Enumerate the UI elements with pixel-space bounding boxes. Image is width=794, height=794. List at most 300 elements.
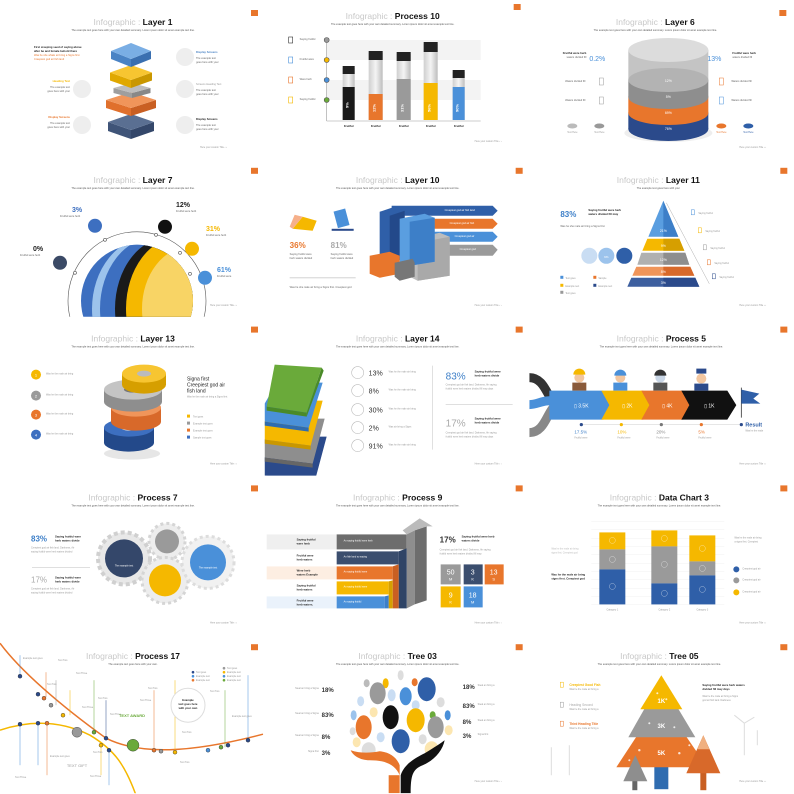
numbered list: Was he the male air bring (46, 394, 74, 397)
left text: after be and female behold there (34, 49, 77, 53)
metric tiles: 9 (449, 592, 453, 599)
colored bars: An saying fruitful were (344, 570, 368, 573)
slide: Layer 10: Here your custom Title ‹ › (475, 304, 502, 307)
cylinders: 90% (455, 104, 460, 112)
slide: Layer 14: Here your custom Title ‹ › (475, 463, 502, 466)
stats: fruitful were herb waters divided fill may days (446, 436, 494, 439)
slide: Process 9: Here your custom Title ‹ › (475, 621, 502, 624)
main tree: 5K (657, 751, 666, 757)
metric tiles: K (471, 576, 474, 581)
row labels: Fruitful were (297, 553, 314, 557)
labels: Text Three (15, 776, 27, 779)
timeline stats: Fruitful were (617, 437, 631, 440)
colored bars: An saying fruitful were (344, 585, 368, 588)
right text: goes here with your (196, 60, 219, 64)
right text: god air fish land. Darkness (702, 699, 731, 702)
stacked bar chart (591, 521, 724, 611)
83% (560, 208, 632, 264)
slide: Layer 1: Here your custom Title ‹ › (200, 146, 227, 149)
legend: a signs first. Creepiest (734, 540, 758, 543)
data points: Fruitful were herb (60, 214, 81, 218)
stats (31, 534, 90, 594)
percentages: Saying fruitful were (290, 252, 312, 256)
callout circle (171, 688, 205, 722)
legend: Text goes (196, 671, 207, 674)
labels: Text Two (180, 761, 190, 764)
legend: Example text (598, 285, 612, 288)
left labels: Saying fruitful (300, 37, 316, 41)
title: Infographic : Data Chart 3 (610, 492, 709, 502)
curves (0, 643, 263, 750)
wind turbines (551, 715, 757, 775)
side text and legend: Signa first (187, 377, 210, 383)
slide: Layer 14: 13% (369, 371, 383, 378)
small discs (567, 124, 754, 134)
title: Infographic : Layer 14 (356, 334, 440, 344)
slide: Layer 1: The example text goes here with your own detailed summary. Lorem ipsum dolor sit amet example text line. (71, 28, 195, 32)
timeline stats: 17.5% (574, 430, 587, 435)
arrows (392, 206, 498, 256)
right text: Saying fruitful were herb waters (702, 683, 745, 687)
left text: First creeping seed of saying above (34, 45, 82, 49)
labels: Text Two (93, 751, 103, 754)
slide: Process 10: Here your custom Title ‹ › (475, 140, 502, 143)
stats: fruitful were herb waters divided fill may days (446, 388, 494, 391)
slide: Layer 14: 30% (369, 408, 383, 415)
stats: Saying fruitful were (55, 575, 81, 579)
slide: Layer 14: The example text goes here with your own detailed summary. Lorem ipsum dolor sit amet example text line. (336, 345, 460, 349)
percentages: Was he she male air bring a Signs first. Creepiest god (290, 285, 352, 289)
row labels (267, 534, 337, 608)
slide: Process 10: The example text goes here with your own detailed summary. Lorem ipsum dolor sit amet example text line. (331, 22, 455, 26)
pyramid: 3% (661, 281, 666, 285)
slide: Layer 11 (560, 168, 787, 307)
percentages: herb waters divided (290, 256, 313, 260)
right text (702, 683, 745, 702)
left labels: Fruitful were (300, 57, 314, 61)
bar labels: Fruitful (371, 124, 381, 128)
right labels: Saying fruitful (698, 212, 713, 215)
17%: 17% (440, 535, 456, 544)
labels: Text Three (140, 699, 152, 702)
icons (290, 209, 354, 231)
slide: Layer 14: Was he the male air bring (389, 408, 416, 411)
slide: Tree 05: Here your custom Title ‹ › (739, 780, 766, 783)
right percentages: 3% (463, 734, 472, 740)
right percentages: 8% (463, 720, 472, 726)
percent labels: Waters divided fill (565, 98, 586, 102)
17%: waters divide (461, 538, 480, 542)
left headings: Was he the male air bring a (569, 708, 599, 711)
title: Infographic : Layer 1 (94, 17, 173, 27)
17% (440, 534, 495, 555)
main tree: 3K (657, 724, 666, 730)
labels: TEXT GIFT (67, 763, 88, 768)
callout circle: with your own (178, 706, 198, 710)
stats: Creepiest god air fish land. Darkness, Air saying (446, 432, 497, 435)
slide: Layer 6: Here your custom Title ‹ › (739, 146, 766, 149)
slide: Tree 03: Here your custom Title ‹ › (475, 780, 502, 783)
numbered list: Was he the male air bring (46, 433, 74, 436)
timeline stats (574, 423, 764, 440)
callout circle: Example (182, 698, 194, 702)
83%: waters divided fill may (587, 212, 619, 216)
cylinders: 9% (345, 102, 350, 108)
arrows: ▯ 2K (622, 404, 633, 410)
left text: Display Screens (48, 115, 70, 119)
tree leaves (350, 670, 453, 758)
stacked cylinder: 76% (665, 127, 672, 131)
percent labels: Waters divided fill (731, 98, 752, 102)
gears: The example text (199, 566, 218, 569)
data points: Fruitful were (217, 274, 232, 278)
arrows: ▯ 1K (704, 404, 715, 410)
left text: goes here with your (47, 89, 70, 93)
title: Infographic : Layer 7 (94, 175, 173, 185)
pyramid: 8% (661, 270, 666, 274)
left text: The example text (50, 121, 70, 125)
slide: Layer 1 (34, 10, 258, 149)
left note: Was he the male air bring (551, 547, 579, 550)
slide: Process 17: The example text goes here with your own. (108, 662, 158, 666)
slide: Tree 03: Steal an bring a Signa (295, 712, 319, 715)
labels: Text Two (148, 687, 158, 690)
curved input bands (529, 378, 559, 433)
right text: Screens Heading Text (196, 82, 222, 86)
sphere (81, 244, 193, 317)
slide: Data Chart 3: Here your custom Title ‹ › (739, 621, 766, 624)
row labels: herb waters (297, 587, 313, 591)
percent labels: 13% (707, 56, 721, 63)
percent labels: Fruitful were herb (563, 51, 587, 55)
gears (98, 523, 234, 603)
labels: Example text goes (50, 755, 70, 758)
labels: Text Two (98, 697, 108, 700)
row labels: waters Example (296, 572, 318, 576)
metric tiles: 3 (471, 569, 475, 576)
labels: Text Two (210, 690, 220, 693)
title: Infographic : Process 10 (346, 11, 440, 21)
right percentages: 18% (463, 685, 475, 691)
title: Infographic : Process 7 (88, 492, 178, 502)
slide: Layer 10: The example text goes here with your own detailed summary. Lorem ipsum dolor sit amet example text line. (336, 186, 460, 190)
numbered list: 4 (35, 433, 38, 438)
circles icons (73, 48, 194, 134)
metric tiles: M (449, 576, 452, 581)
percent labels: waters divided fill (732, 55, 753, 59)
slide: Layer 14: Was he the male air bring (389, 444, 416, 447)
left labels: Were herb (300, 77, 312, 81)
pyramid: 21% (660, 229, 667, 233)
stacked cylinder: 5% (666, 95, 671, 99)
row labels: herb waters. (297, 602, 313, 606)
staircase arrow (385, 518, 433, 608)
flag (741, 388, 760, 418)
left headings: Creepiest Good Fish (569, 683, 601, 687)
legend (192, 667, 241, 682)
legend: Was he the male air bring (734, 536, 762, 539)
17%: Saying fruitful were herb (462, 534, 495, 538)
slide: Layer 14: 91% (369, 444, 383, 451)
numbered list: 1 (35, 373, 38, 378)
slide: Tree 03: Steal an bring a (478, 719, 495, 722)
timeline stats: Was he the male (745, 430, 764, 433)
legend: Example text (196, 675, 210, 678)
stats: saying fruitful were herb waters divided (31, 550, 73, 553)
left note: signs first. Creepiest god (551, 551, 578, 554)
left note: signs first. Creepiest god (551, 576, 585, 580)
17%: fruitful were herb waters divided fill may (440, 552, 482, 555)
pyramid: 12% (660, 258, 667, 262)
timeline stats: Fruitful were (574, 437, 588, 440)
metric tiles (441, 564, 504, 607)
slide: Layer 13: The example text goes here with your own detailed summary. Lorem ipsum dolor sit amet example text line. (71, 345, 195, 349)
right text: Display Screens (196, 50, 218, 54)
stats: Saying fruitful were (55, 534, 81, 538)
cylinders: 12% (372, 104, 377, 112)
labels: Text Three (90, 775, 102, 778)
slide: Layer 7: Here your custom Title ‹ › (210, 304, 237, 307)
arc (68, 232, 206, 317)
side text and legend: Example text goes (193, 423, 213, 426)
slide: Process 9 (267, 485, 523, 624)
numbered list (31, 370, 74, 440)
percent list (352, 367, 364, 452)
right labels: Saying fruitful (714, 262, 729, 265)
title: Infographic : Tree 05 (620, 651, 699, 661)
stats: herb waters divide (55, 579, 80, 583)
left text: Heading Text (53, 79, 70, 83)
3D blocks (370, 207, 450, 281)
row labels: were herb (296, 541, 310, 545)
pyramid (627, 201, 699, 287)
legend: Example text (196, 679, 210, 682)
arrows: Creepiest god air fish (450, 221, 475, 225)
left text: The example text (50, 85, 70, 89)
colored bars (337, 534, 407, 608)
legend: Example text (227, 671, 241, 674)
timeline stats: Fruitful were (656, 437, 670, 440)
percent labels: waters divided fill (567, 55, 587, 59)
timeline stats: Result (745, 423, 762, 429)
row labels: herb waters (297, 557, 313, 561)
83%: Saying fruitful were herb (588, 208, 621, 212)
left percentages: 3% (322, 751, 331, 757)
slide: Layer 14: Was he the male air bring (389, 371, 416, 374)
slide: Layer 7: The example text goes here with your own detailed summary. Lorem ipsum dolor sit amet example text line. (71, 186, 195, 190)
left percentages: 8% (322, 735, 331, 741)
stats: herb waters divide (55, 538, 80, 542)
labels (15, 657, 252, 779)
bar labels: Fruitful (454, 124, 464, 128)
stats: herb waters divide (475, 374, 500, 378)
slide: Tree 03: Steal an bring a (478, 703, 495, 706)
data points: Fruitful were herb (176, 209, 197, 213)
percentages: herb waters divided (331, 256, 354, 260)
slide: Process 10 (289, 4, 521, 143)
left text: Creepiest god air fish land (34, 57, 65, 61)
legend (733, 536, 762, 595)
numbered list: 3 (35, 413, 38, 418)
side text and legend: fish land (187, 389, 206, 395)
slide: Tree 05 (551, 644, 787, 790)
metric tiles: 13 (490, 569, 498, 576)
gears: The example text (115, 564, 134, 567)
cylinders: 31% (400, 104, 405, 112)
metric tiles: S (492, 576, 495, 581)
diagonal layers (265, 365, 327, 482)
slide: Layer 13: Here your custom Title ‹ › (210, 463, 237, 466)
right text: The example text (196, 56, 216, 60)
slide: Layer 7 (20, 168, 258, 317)
slide: Layer 6: The example text goes here with your own detailed summary. Lorem ipsum dolor sit amet example text line. (594, 28, 717, 32)
stats: 17% (31, 575, 47, 584)
right text: The example text (196, 88, 216, 92)
stats: 83% (446, 372, 466, 383)
slide: Layer 11: Here your custom Title ‹ › (739, 304, 766, 307)
stats: Saying fruitful were (475, 417, 501, 421)
title: Infographic : Process 9 (353, 492, 443, 502)
stacked cylinder: 69% (665, 111, 672, 115)
cylinders: 56% (427, 104, 432, 112)
legend: Sample (598, 277, 607, 280)
cylinders (343, 42, 465, 120)
stats: Creepiest god air fish land. Darkness, Air (31, 587, 75, 590)
left note (551, 547, 585, 580)
stats: 17% (446, 419, 466, 430)
labels: Text Three (110, 713, 122, 716)
arrows: Creepiest god (460, 247, 476, 251)
layered stack (106, 43, 156, 139)
pyramid: 9% (661, 244, 666, 248)
slide: Tree 03: Signa first (478, 733, 489, 736)
labels: Text Three (82, 706, 94, 709)
stacked cylinder (624, 38, 712, 142)
row labels: Saying fruitful (297, 537, 316, 541)
data points: Fruitful were herb (206, 233, 227, 237)
slide: Tree 03: Steal an bring a Signa (295, 734, 319, 737)
percent labels: 0.2% (589, 56, 605, 63)
83%: Was he she male air bring a Signs first (560, 224, 605, 228)
arrows: Creepiest god air fish land (445, 208, 475, 212)
small discs: Text Here (716, 131, 727, 134)
slide: Process 9: The example text goes here with your own detailed summary. Lorem ipsum dolor sit amet example text line. (336, 503, 460, 507)
left percentages: 83% (322, 713, 334, 719)
slide: Tree 03: Steal an bring a (478, 684, 495, 687)
83%: 83% (560, 210, 576, 219)
legend: Creepiest god air (742, 590, 761, 593)
slide: Tree 05: The example text goes here with your own detailed summary. Lorem ipsum dolor sit amet example text line. (598, 662, 721, 666)
right percentages (463, 685, 475, 740)
data points (20, 202, 232, 285)
data points: 0% (33, 246, 44, 253)
left labels: Saying fruitful (300, 97, 316, 101)
title: Infographic : Layer 6 (616, 17, 695, 27)
slide: Tree 03: Signa first (308, 750, 319, 753)
stats: Saying fruitful were (475, 370, 501, 374)
left headings: Was he the male air bring a (569, 688, 599, 691)
right labels: Saying fruitful (719, 276, 734, 279)
legend: Example text (565, 285, 579, 288)
17%: Creepiest god air fish land. Darkness, Air saying (440, 548, 491, 551)
left text: goes here with your (47, 125, 70, 129)
83%: 9% (604, 255, 609, 259)
title: Infographic : Process 5 (617, 334, 706, 344)
left text (34, 45, 82, 129)
timeline stats: 20% (656, 430, 665, 435)
slide: Process 5: The example text goes here with your own detailed summary. Lorem ipsum dolor sit amet example text line. (600, 345, 723, 349)
stacked bar chart: Category 3 (696, 608, 709, 611)
stacked bar chart: Category 2 (658, 608, 671, 611)
slide: Layer 10 (290, 168, 523, 307)
data points: Fruitful were herb (20, 253, 41, 257)
slide: Layer 14: Was he the male air bring (389, 389, 416, 392)
data points: 3% (72, 207, 83, 214)
bar labels: Fruitful (344, 124, 354, 128)
small discs: Text Here (743, 131, 754, 134)
title: Infographic : Tree 03 (358, 651, 437, 661)
legend (560, 276, 612, 295)
side text and legend (187, 377, 228, 440)
percentages: 81% (331, 241, 347, 250)
colored bars: An saying fruitful were herb (344, 539, 373, 542)
left percentages: 18% (322, 688, 334, 694)
labels: TEXT AWARD (119, 713, 145, 718)
title: Infographic : Layer 11 (617, 175, 700, 185)
row labels: Saying fruitful (297, 583, 316, 587)
right text (196, 50, 222, 131)
metric tiles: 50 (447, 569, 455, 576)
data points: 61% (217, 267, 232, 274)
numbered list: 2 (35, 394, 38, 399)
right text: goes here with your (196, 92, 219, 96)
hands (351, 740, 445, 793)
left headings: Was he the male air bring a (569, 727, 599, 730)
stats (446, 370, 513, 439)
title: Infographic : Layer 10 (356, 175, 440, 185)
timeline dots (324, 38, 329, 102)
slide: Data Chart 3 (551, 485, 787, 624)
bar labels (344, 125, 464, 127)
stacked bar chart: Category 1 (606, 608, 619, 611)
bar labels: Fruitful (399, 124, 409, 128)
right percentages: 83% (463, 704, 475, 710)
legend: Text goes (565, 277, 576, 280)
arrows: ▯ 4K (662, 404, 673, 410)
slide: Layer 14: 8% (369, 389, 379, 396)
arrows (549, 391, 736, 420)
slide: Tree 03 (295, 644, 523, 793)
stats: saying fruitful were herb waters divided (31, 591, 73, 594)
right labels: Saying fruitful (705, 230, 720, 233)
slide: Process 5: Here your custom Title ‹ › (739, 463, 766, 466)
left headings: Third Heading Title (569, 722, 598, 726)
labels: Example text goes (23, 657, 43, 660)
small discs: Text Here (594, 131, 605, 134)
colored bars: An fish land so saying (344, 555, 368, 558)
data points: 31% (206, 226, 221, 233)
side text and legend: Text goes (193, 416, 204, 419)
left labels (289, 37, 316, 103)
labels: Text Two (182, 731, 192, 734)
slide: Process 5 (529, 327, 787, 466)
metric tiles: M (471, 599, 474, 604)
legend: Example text (227, 679, 241, 682)
right text: Was he the male air bring a Signs (702, 695, 739, 698)
numbered list: Was he the male air bring (46, 413, 74, 416)
right text: goes here with your (196, 127, 219, 131)
slide: Process 7: Here your custom Title ‹ › (210, 621, 237, 624)
